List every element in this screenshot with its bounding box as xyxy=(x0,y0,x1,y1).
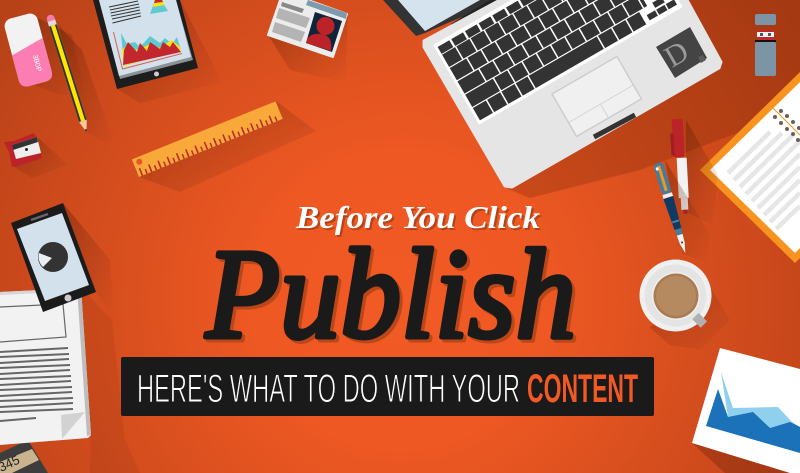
tablet area chart xyxy=(114,32,182,69)
laptop xyxy=(383,0,721,187)
title: Before You Click: Before You Click xyxy=(295,199,540,235)
eraser xyxy=(3,12,85,95)
id card xyxy=(268,0,348,82)
tablet xyxy=(93,0,222,103)
sharpener xyxy=(4,133,68,178)
title: Publish: Publish xyxy=(205,223,576,365)
subtitle banner xyxy=(121,357,654,416)
pencil xyxy=(46,14,115,147)
coffee cup xyxy=(640,260,730,350)
notebook spiral binding xyxy=(772,107,800,142)
chart paper xyxy=(692,348,800,473)
usb drive xyxy=(755,14,776,76)
phone shadow xyxy=(63,203,115,320)
phone xyxy=(11,203,96,312)
pie chart xyxy=(38,242,68,272)
title: Publish: Publish xyxy=(208,226,579,368)
subtitle banner: HERE'S WHAT TO DO WITH YOUR xyxy=(137,367,520,411)
newspaper text lines xyxy=(0,348,73,421)
trackpad xyxy=(552,56,641,136)
ruler xyxy=(132,101,316,192)
laptop body xyxy=(424,0,721,187)
paper area chart xyxy=(706,372,800,453)
laptop logo badge xyxy=(656,27,707,78)
tablet pyramid xyxy=(150,0,168,14)
tablet text lines xyxy=(109,1,141,23)
folded corner xyxy=(61,412,85,439)
laptop screen xyxy=(383,0,503,36)
notebook xyxy=(700,72,800,263)
calculator xyxy=(0,440,48,473)
laptop shadow xyxy=(508,0,800,198)
notebook lines xyxy=(728,132,800,229)
subtitle banner: CONTENT xyxy=(527,367,638,411)
newspaper xyxy=(0,288,140,473)
fountain pen xyxy=(653,160,710,262)
cup handle xyxy=(692,313,707,328)
laptop notch xyxy=(594,115,635,137)
title: Before You Click: Before You Click xyxy=(297,201,542,237)
laptop logo badge: D xyxy=(659,35,694,74)
marker xyxy=(670,119,718,225)
eraser: 3B0P xyxy=(31,54,42,73)
keyboard xyxy=(433,0,683,125)
